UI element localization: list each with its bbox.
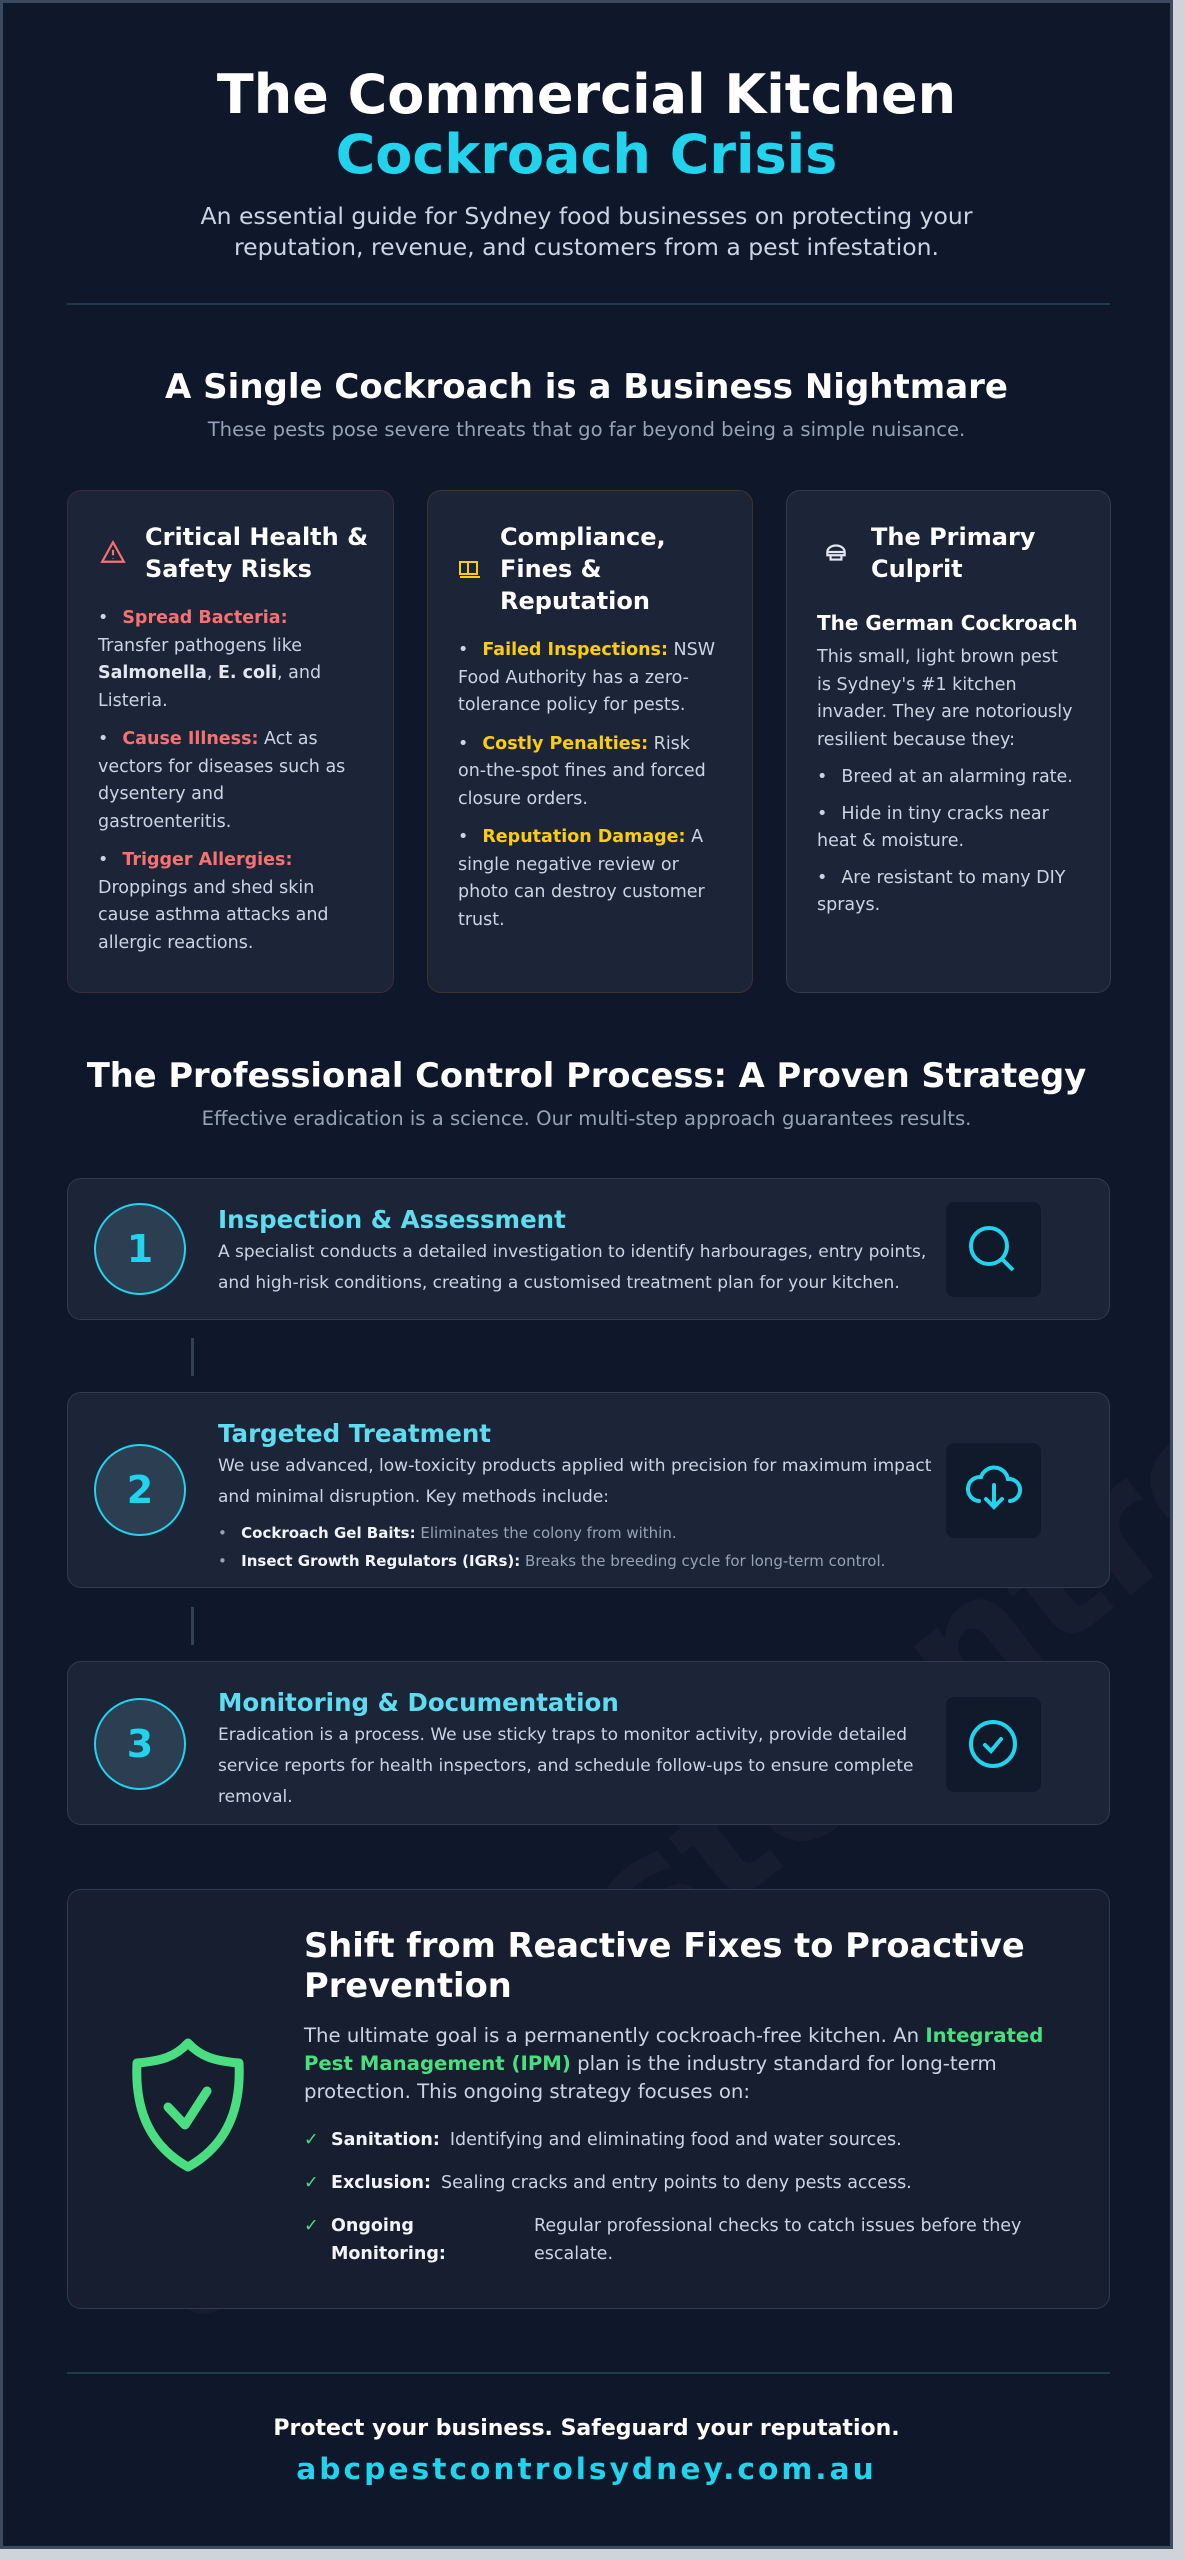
subtitle: reputation, revenue, and customers from a pest infestation.: [234, 233, 939, 261]
step 1: 1: [127, 1227, 153, 1271]
step 3: Monitoring & Documentation: [218, 1688, 619, 1717]
subtitle: [200, 202, 973, 261]
text: german cockroach: [816, 611, 1078, 915]
bullets: compliance: Reputation Damage: A single negative review or photo can destroy customer trust.: [458, 827, 705, 930]
section subheading: process: Effective eradication is a science. Our multi-step approach guarantees results.: [202, 1107, 971, 1130]
bullets: compliance: Costly Penalties: Risk on-the-spot fines and forced closure orders.: [458, 734, 706, 808]
bullets: health: Trigger Allergies: Droppings and shed skin cause asthma attacks and allergic reactions.: [98, 850, 329, 952]
bullets: compliance: Failed Inspections: NSW Food Authority has a zero-tolerance policy for pests.: [458, 640, 715, 715]
step 1: [67, 1178, 1110, 1320]
step 2: [67, 1392, 1110, 1588]
step 2: We use advanced, low-toxicity products applied with precision for maximum impact and minimal disruption. Key methods include:: [218, 1456, 931, 1507]
text: prevention: The ultimate goal is a permanently cockroach-free kitchen. An Integrated Pest Management (IPM) plan is the industry standard for long-term protection. This ongoing strategy focuses on:: [304, 2024, 1043, 2103]
checklist: Sanitation:: [331, 2130, 440, 2150]
bullets: health: Cause Illness: Act as vectors for diseases such as dysentery and gastroenteritis.: [98, 729, 345, 832]
icon: bug: [826, 544, 846, 561]
title: [217, 63, 956, 186]
checklist: Identifying and eliminating food and water sources.: [450, 2130, 902, 2150]
heading: prevention: Shift from Reactive Fixes to Proactive Prevention: [304, 1926, 1025, 2005]
bullets: compliance: [458, 640, 715, 930]
step 2: • Insect Growth Regulators (IGRs): Breaks the breeding cycle for long-term control.: [218, 1552, 885, 1570]
checklist: ✓: [304, 2130, 319, 2150]
panel: health risks: [67, 490, 394, 993]
panel: culprit: [786, 490, 1111, 993]
checklist: ✓: [304, 2216, 319, 2236]
checklist: Sealing cracks and entry points to deny pests access.: [441, 2173, 912, 2193]
footer tagline: Protect your business. Safeguard your reputation.: [273, 2416, 900, 2441]
text: german cockroach: Are resistant to many DIY sprays.: [817, 868, 1065, 915]
icon: search: [946, 1202, 1041, 1297]
step 2: • Cockroach Gel Baits: Eliminates the colony from within.: [218, 1524, 677, 1542]
subtitle: An essential guide for Sydney food businesses on protecting your: [201, 202, 972, 230]
footer url: abcpestcontrolsydney.com.au: [296, 2452, 877, 2487]
section subheading: These pests pose severe threats that go far beyond being a simple nuisance.: [208, 418, 965, 441]
step 2: 2: [127, 1468, 153, 1512]
text: german cockroach: This small, light brown pest is Sydney's #1 kitchen invader. They are notoriously resilient because they:: [817, 647, 1073, 750]
step 3: [67, 1661, 1110, 1825]
text: german cockroach: Breed at an alarming rate.: [841, 767, 1073, 787]
icon: warning: [100, 540, 126, 563]
heading: compliance: Compliance, Fines & Reputation: [500, 523, 666, 615]
heading: health: Critical Health & Safety Risks: [145, 523, 368, 583]
text: german cockroach: The German Cockroach: [817, 611, 1078, 635]
step 3: Eradication is a process. We use sticky traps to monitor activity, provide detailed service reports for health inspectors, and schedule follow-ups to ensure complete removal.: [218, 1725, 913, 1807]
bullets: health: Spread Bacteria: Transfer pathogens like Salmonella, E. coli, and Listeria.: [98, 608, 321, 710]
icon: check circle: [946, 1697, 1041, 1792]
title: Cockroach Crisis: [336, 123, 837, 186]
checklist: ✓: [304, 2173, 319, 2193]
text: german cockroach: Hide in tiny cracks near heat & moisture.: [817, 804, 1049, 851]
panel: prevention: [67, 1889, 1110, 2309]
checklist: Regular professional checks to catch issues before they escalate.: [534, 2216, 1021, 2264]
title: The Commercial Kitchen: [217, 63, 956, 126]
checklist: Ongoing Monitoring:: [331, 2216, 446, 2264]
section heading: nightmare: A Single Cockroach is a Business Nightmare: [165, 367, 1008, 407]
icon: shield: [132, 2038, 244, 2172]
section heading: process: The Professional Control Process: A Proven Strategy: [87, 1056, 1086, 1095]
step 3: 3: [127, 1722, 153, 1766]
icon: book: [459, 561, 480, 578]
icon: cloud download: [946, 1443, 1041, 1538]
checklist: Exclusion:: [331, 2173, 431, 2193]
step 1: Inspection & Assessment: [218, 1205, 566, 1234]
checklist: [304, 2130, 1021, 2264]
step 1: A specialist conducts a detailed investigation to identify harbourages, entry points, and high-risk conditions, creating a customised treatment plan for your kitchen.: [218, 1242, 926, 1293]
heading: culprit: The Primary Culprit: [871, 523, 1035, 583]
step 2: Targeted Treatment: [218, 1419, 491, 1448]
bullets: health: [98, 608, 345, 952]
panel: compliance: [427, 490, 753, 993]
